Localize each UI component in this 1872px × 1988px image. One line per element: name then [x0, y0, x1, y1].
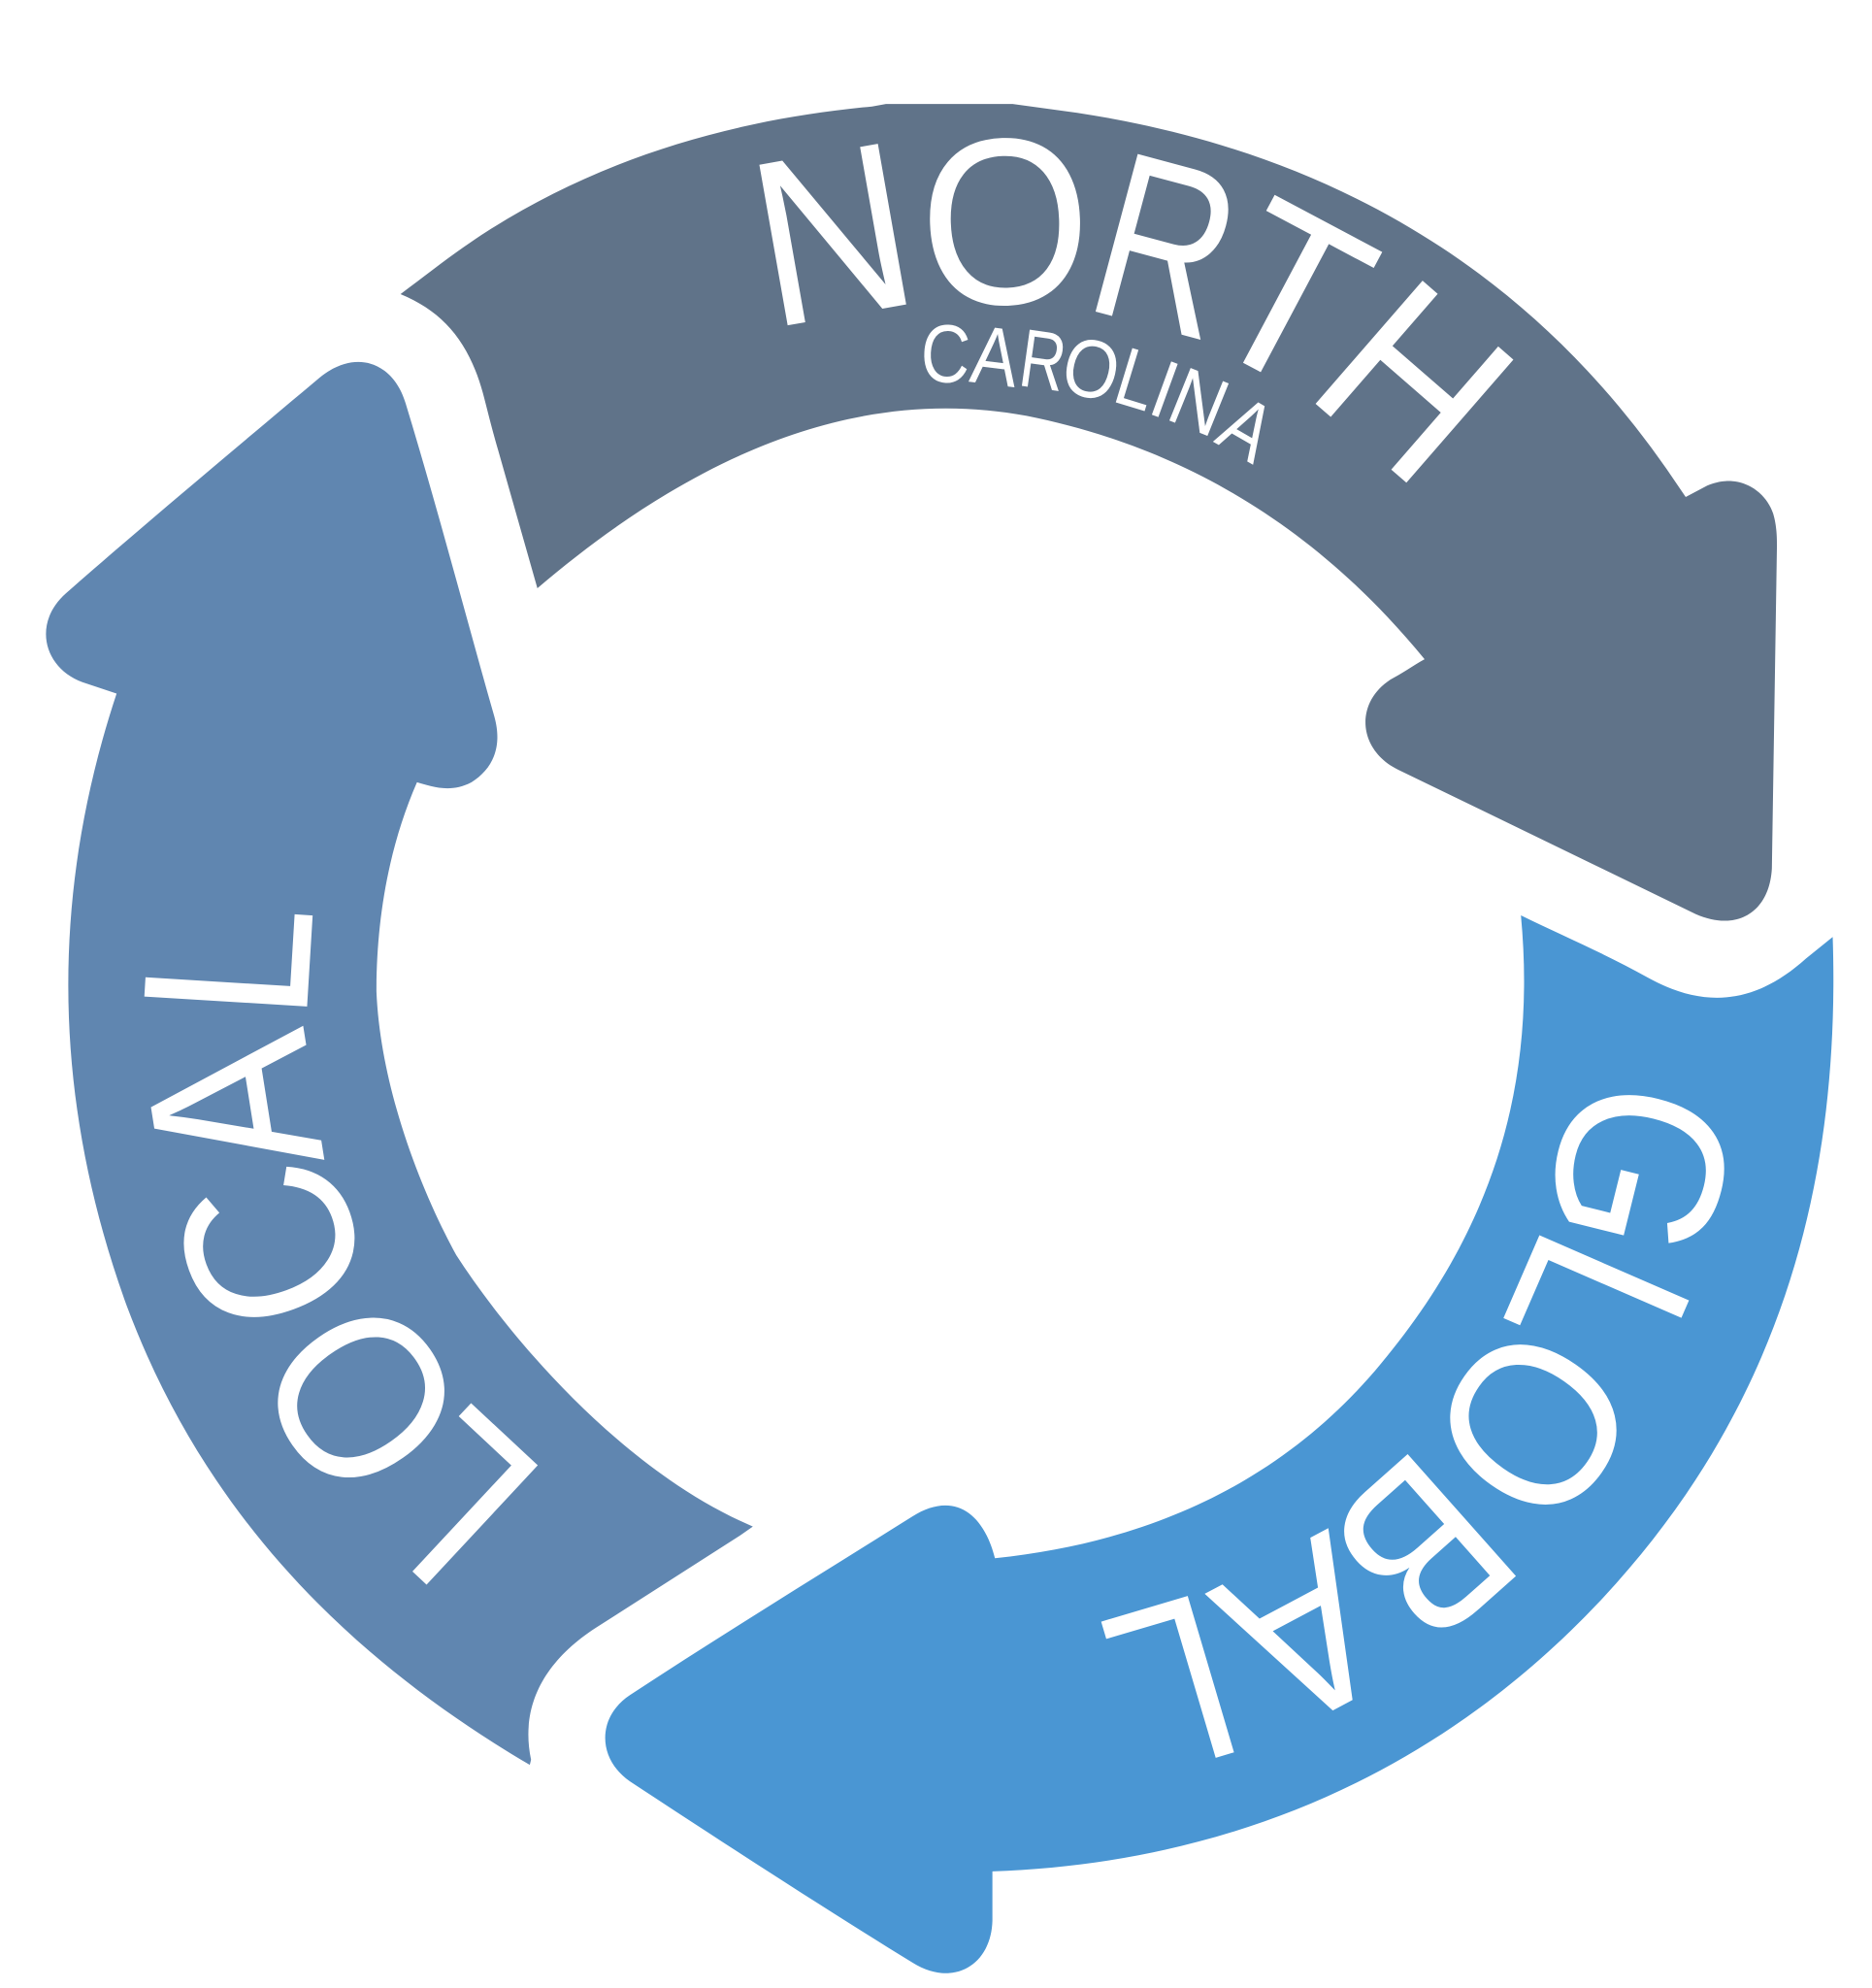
- subheading: CAROLINA: I: [1139, 343, 1190, 437]
- heading: LOCAL: [92, 896, 585, 1635]
- heading: GLOBAL: A: [1180, 1482, 1429, 1782]
- heading: NORTH: T: [1170, 149, 1410, 444]
- heading: NORTH: [734, 86, 1560, 533]
- heading: LOCAL: O: [206, 1252, 517, 1541]
- heading: NORTH: N: [734, 91, 933, 379]
- heading: NORTH: H: [1269, 231, 1560, 533]
- heading: LOCAL: A: [92, 1017, 375, 1194]
- heading: LOCAL: L: [92, 896, 364, 1027]
- heading: NORTH: O: [915, 86, 1095, 356]
- panel: Global arrow: [606, 915, 1833, 1973]
- heading: GLOBAL: O: [1376, 1279, 1689, 1569]
- subheading: CAROLINA: N: [1157, 349, 1240, 455]
- subheading: CAROLINA: A: [967, 308, 1024, 405]
- subheading: CAROLINA: R: [1014, 312, 1071, 409]
- heading: NORTH: R: [1067, 101, 1264, 391]
- arrow: north segment: [401, 104, 1777, 921]
- arrow: global segment: [606, 915, 1833, 1973]
- heading: LOCAL: C: [117, 1127, 424, 1366]
- heading: GLOBAL: [1080, 1056, 1789, 1829]
- heading: GLOBAL: B: [1284, 1405, 1562, 1694]
- subheading: CAROLINA: [918, 306, 1291, 480]
- panel: Local arrow: [46, 362, 753, 1765]
- heading: GLOBAL: G: [1492, 1056, 1789, 1283]
- subheading: CAROLINA: A: [1204, 377, 1291, 480]
- heading: LOCAL: L: [319, 1361, 585, 1635]
- arrow: local segment: [46, 362, 753, 1765]
- panel: North Carolina arrow: [401, 86, 1777, 921]
- subheading: CAROLINA: O: [1054, 317, 1129, 420]
- heading: GLOBAL: L: [1080, 1542, 1264, 1829]
- subheading: CAROLINA: L: [1105, 329, 1168, 429]
- heading: GLOBAL: L: [1454, 1200, 1742, 1409]
- subheading: CAROLINA: C: [918, 306, 972, 401]
